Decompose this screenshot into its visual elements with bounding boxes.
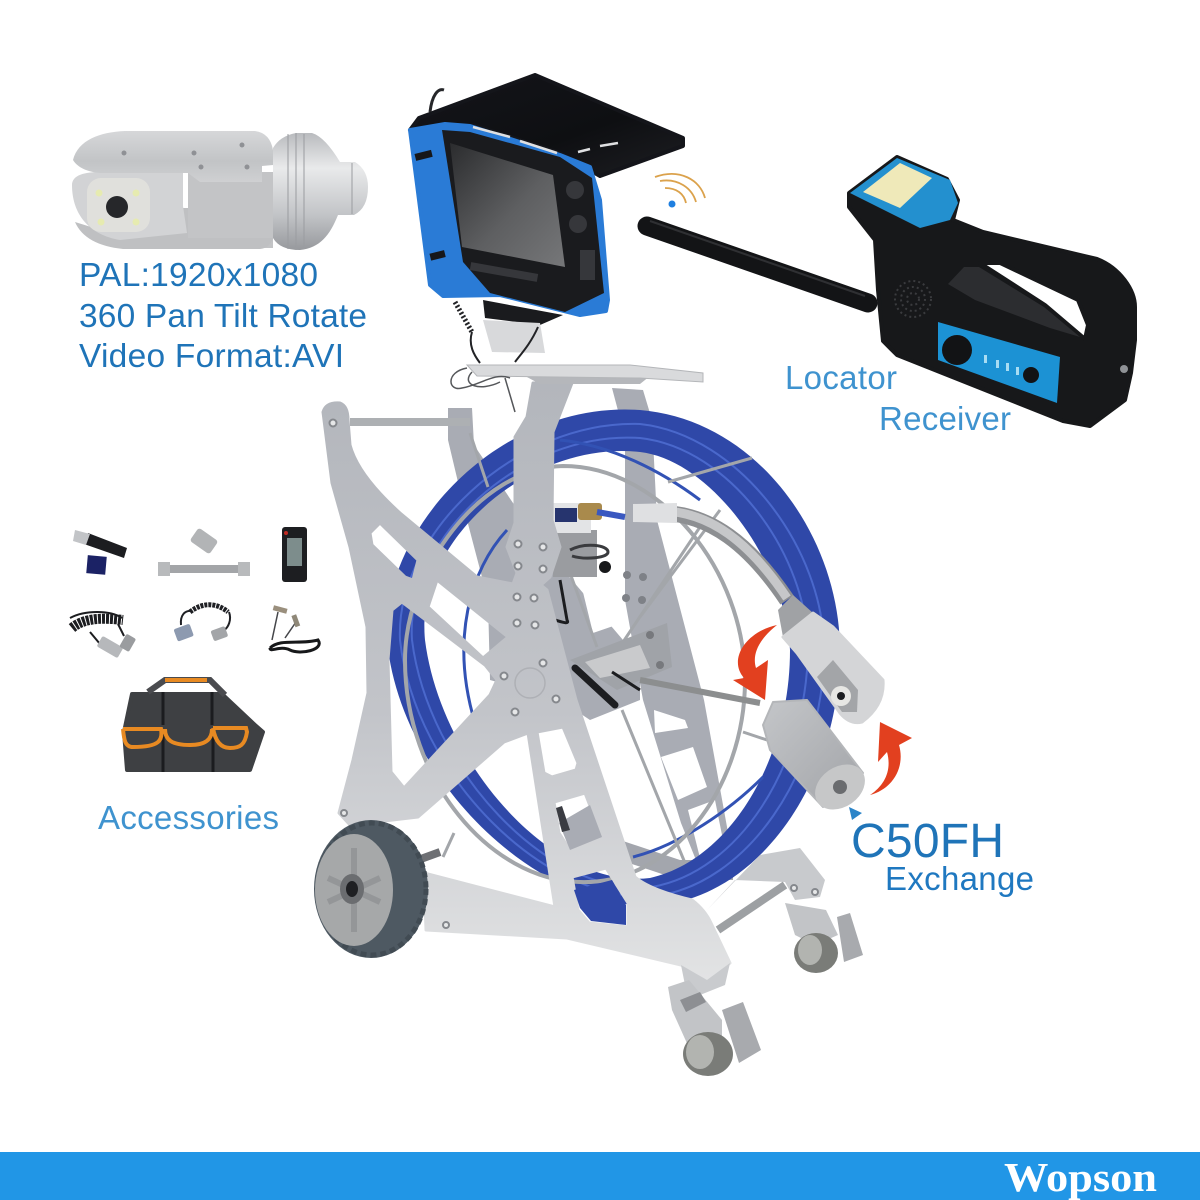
icon: tool bag bbox=[123, 680, 263, 772]
rear frame bolts bbox=[622, 571, 647, 604]
label: exchange model: Exchange bbox=[885, 860, 1034, 897]
panel: front cart frame bbox=[323, 383, 730, 980]
text block: camera specs: 360 Pan Tilt Rotate bbox=[79, 298, 367, 335]
icon: upper camera head bbox=[778, 595, 883, 723]
icon: large wheel bbox=[314, 820, 428, 958]
icon: earphones bbox=[270, 605, 319, 652]
frame bolts bbox=[330, 420, 560, 928]
icon: front caster bbox=[668, 963, 761, 1076]
arrow: red rotate left bbox=[733, 625, 777, 700]
panel: blue cable reel bbox=[387, 409, 840, 906]
footer bar bbox=[0, 1152, 1200, 1200]
wire tangle bbox=[451, 368, 515, 412]
label: locator receiver: Receiver bbox=[879, 400, 1011, 437]
icon: coiled cable bbox=[70, 612, 136, 658]
hood highlights bbox=[473, 127, 618, 153]
icon: remote control bbox=[282, 527, 307, 582]
icon: usb and sd card bbox=[73, 530, 127, 575]
monitor side slots bbox=[415, 150, 446, 261]
monitor bracket bbox=[483, 300, 563, 325]
text block: camera specs bbox=[79, 257, 367, 375]
label: accessories: Accessories bbox=[98, 799, 279, 836]
icon: adapter cable bbox=[173, 605, 230, 642]
label: exchange model bbox=[849, 807, 1034, 897]
panel: top mounting plate bbox=[451, 365, 703, 412]
panel: reel wire cage bbox=[350, 422, 767, 882]
icon: rear caster bbox=[785, 903, 863, 973]
connector bracket bbox=[553, 503, 611, 577]
panel: rear frame bbox=[448, 388, 733, 880]
text block: camera specs: PAL:1920x1080 bbox=[79, 257, 318, 294]
panel: accessories images bbox=[70, 527, 319, 772]
icon: wifi signal bbox=[655, 174, 705, 208]
panel: pan tilt camera bbox=[72, 131, 368, 250]
icon: extension rod and camera plug bbox=[158, 528, 250, 576]
arrow: red rotate right bbox=[870, 722, 912, 795]
panel: monitor with sun hood bbox=[410, 75, 683, 363]
text block: camera specs: Video Format:AVI bbox=[79, 338, 344, 375]
panel: locator receiver bbox=[647, 157, 1135, 426]
label: locator receiver bbox=[785, 359, 1011, 437]
icon: lower camera head bbox=[763, 700, 874, 819]
monitor controls bbox=[470, 181, 595, 282]
frame ladder window fill bbox=[559, 805, 602, 850]
panel: camera cable and coupling bbox=[597, 503, 787, 600]
loose cable strands bbox=[464, 440, 763, 857]
label: exchange model: C50FH bbox=[851, 815, 1004, 868]
panel: rear base and rod bbox=[707, 848, 825, 930]
brand name: Wopson bbox=[1004, 1154, 1157, 1200]
label: locator receiver: Locator bbox=[785, 359, 897, 396]
panel: hub and black cables bbox=[553, 503, 760, 705]
speaker grille bbox=[895, 281, 931, 317]
